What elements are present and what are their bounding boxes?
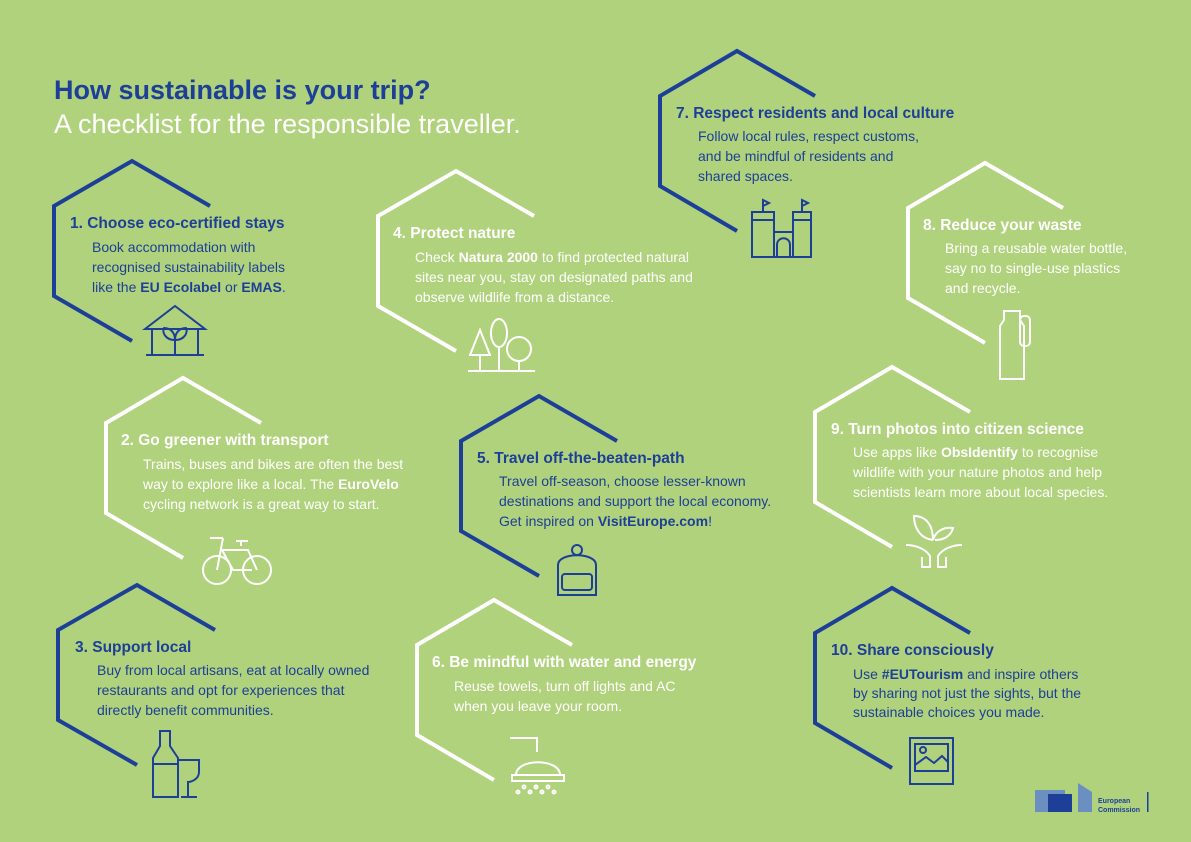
panel: 4 protect nature: sites near you, stay on designated paths and [415, 269, 693, 285]
icon: backpack [558, 545, 596, 595]
icon: hands holding plant [906, 516, 962, 567]
icon: bottle and glass [153, 731, 199, 797]
logo: European Commission: Commission [1098, 807, 1140, 814]
icon: shower [510, 738, 564, 794]
panel: 1 eco-certified stays [54, 161, 286, 355]
panel: 2 transport: Trains, buses and bikes are often the best [143, 456, 403, 472]
panel: 2 transport: cycling network is a great way to start. [143, 496, 380, 512]
panel: 8 reduce waste [908, 163, 1127, 379]
icon: picture frame [910, 738, 953, 784]
panel: 9 citizen science: wildlife with your nature photos and help [852, 464, 1102, 480]
icon: castle [752, 200, 811, 257]
panel: 10 share consciously: sustainable choices you made. [853, 704, 1044, 720]
panel: 7 residents and culture [660, 51, 955, 257]
panel: 8 reduce waste: Bring a reusable water bottle, [945, 240, 1127, 256]
panel: 2 transport: 2. Go greener with transport [121, 432, 329, 449]
panel: 10 share consciously: 10. Share consciously [831, 642, 994, 659]
panel: 7 residents and culture: and be mindful of residents and [698, 148, 893, 164]
icon: house [145, 306, 205, 355]
panel: 8 reduce waste: say no to single-use plastics [945, 260, 1120, 276]
panel: 9 citizen science: 9. Turn photos into citizen science [831, 421, 1084, 438]
panel: 6 water and energy [417, 600, 697, 794]
panel: 6 water and energy: 6. Be mindful with water and energy [432, 654, 697, 671]
panel: 3 support local: directly benefit communities. [97, 702, 274, 718]
panel: 4 protect nature: 4. Protect nature [393, 225, 516, 242]
icon: trees [468, 319, 535, 371]
panel: 1 eco-certified stays: Book accommodation with [92, 239, 255, 255]
panel: 1 eco-certified stays: like the EU Ecolabel or EMAS. [92, 279, 286, 295]
panel: 3 support local [58, 585, 369, 797]
panel: 9 citizen science: Use apps like ObsIdentify to recognise [853, 444, 1098, 460]
panel: 5 off the beaten path: destinations and support the local economy. [499, 493, 771, 509]
logo: European Commission [1035, 783, 1148, 814]
panel: 5 off the beaten path: Travel off-season, choose lesser-known [499, 473, 746, 489]
panel: 9 citizen science [815, 367, 1108, 567]
title: A checklist for the responsible traveller. [54, 109, 521, 139]
panel: 5 off the beaten path [461, 396, 771, 595]
panel: 7 residents and culture: 7. Respect residents and local culture [676, 105, 955, 122]
panel: 6 water and energy: when you leave your room. [453, 698, 622, 714]
panel: 2 transport [106, 378, 403, 584]
panel: 5 off the beaten path: Get inspired on VisitEurope.com! [499, 513, 712, 529]
panel: 4 protect nature: observe wildlife from a distance. [415, 289, 614, 305]
title [54, 75, 521, 139]
panel: 5 off the beaten path: 5. Travel off-the-beaten-path [477, 450, 685, 467]
panel: 3 support local: Buy from local artisans, eat at locally owned [97, 662, 369, 678]
panel: 10 share consciously: Use #EUTourism and inspire others [853, 666, 1078, 682]
panel: 7 residents and culture: Follow local rules, respect customs, [698, 128, 919, 144]
panel: 10 share consciously [815, 588, 1081, 784]
panel: 8 reduce waste: 8. Reduce your waste [923, 217, 1082, 234]
icon: bike [203, 538, 271, 584]
panel: 10 share consciously: by sharing not just the sights, but the [853, 685, 1081, 701]
panel: 8 reduce waste: and recycle. [945, 280, 1020, 296]
panel: 6 water and energy: Reuse towels, turn off lights and AC [454, 678, 676, 694]
panel: 7 residents and culture: shared spaces. [698, 168, 793, 184]
panel: 3 support local: 3. Support local [75, 639, 191, 656]
title: How sustainable is your trip? [54, 75, 431, 105]
logo: European Commission: European [1098, 798, 1130, 805]
panel: 1 eco-certified stays: 1. Choose eco-certified stays [70, 215, 284, 232]
panel: 9 citizen science: scientists learn more about local species. [853, 484, 1108, 500]
panel: 4 protect nature [378, 171, 693, 371]
panel: 2 transport: way to explore like a local. The EuroVelo [142, 476, 399, 492]
panel: 4 protect nature: Check Natura 2000 to find protected natural [415, 249, 689, 265]
icon: water bottle [1000, 311, 1030, 379]
panel: 3 support local: restaurants and opt for experiences that [97, 682, 345, 698]
panel: 1 eco-certified stays: recognised sustainability labels [92, 259, 285, 275]
